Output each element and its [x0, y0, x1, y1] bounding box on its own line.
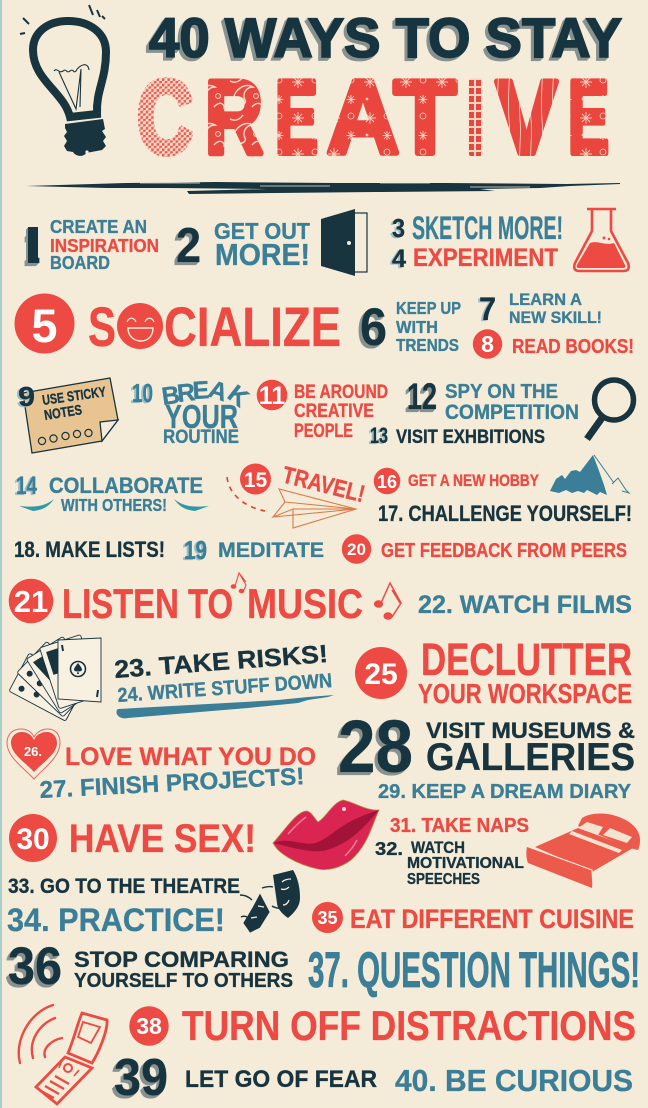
16 get a new hobby: GET A NEW HOBBY	[408, 471, 540, 490]
icon: lips	[273, 800, 379, 870]
38 turn off distractions: 38	[136, 1013, 162, 1039]
12 spy on the competition	[407, 376, 579, 424]
icon: smiley	[117, 303, 163, 349]
8 read books	[473, 329, 634, 359]
27 finish projects: 27. FINISH PROJECTS!	[39, 763, 305, 804]
25 declutter your workspace	[355, 634, 632, 709]
heading: creative: R	[205, 60, 263, 176]
2 get out more	[176, 218, 310, 273]
6 keep up with trends: TRENDS	[396, 335, 459, 355]
6 keep up with trends: 6	[360, 298, 387, 357]
7 learn a new skill	[479, 290, 602, 327]
icon: mountains	[548, 455, 629, 495]
25 declutter your workspace: 25	[364, 658, 398, 691]
10 break your routine: BREAK	[160, 375, 254, 413]
10 break your routine: YOUR	[165, 398, 238, 435]
21 listen to music: MUSIC	[247, 580, 363, 627]
2 get out more: 2	[176, 219, 201, 273]
10 break your routine	[132, 375, 254, 448]
icon: flip phone	[19, 1005, 107, 1104]
33 go to the theatre: 33. GO TO THE THEATRE	[8, 875, 240, 898]
36 stop comparing: 36	[8, 937, 62, 996]
11 be around creative people: 11	[259, 382, 285, 410]
16 get a new hobby	[374, 468, 540, 494]
23 take risks: 23. TAKE RISKS!	[113, 640, 329, 684]
28 visit museums and galleries	[338, 705, 635, 788]
14 collaborate with others: WITH OTHERS!	[61, 495, 167, 515]
13 visit exhibitions: VISIT EXHBITIONS	[396, 427, 545, 448]
title: 40 WAYS TO STAY	[149, 6, 622, 69]
10 break your routine: ROUTINE	[163, 427, 239, 448]
icon: light bulb	[20, 5, 106, 156]
32 watch motivational speeches: WATCH	[411, 838, 465, 857]
5 socialize: 5	[31, 299, 58, 352]
heading: creative: I	[466, 60, 485, 176]
1 create an inspiration board: INSPIRATION	[50, 236, 159, 256]
18 make lists: 18. MAKE LISTS!	[14, 537, 165, 562]
12 spy on the competition: SPY ON THE	[445, 381, 558, 403]
7 learn a new skill: 7	[479, 291, 496, 327]
heading: creative: C	[137, 60, 193, 176]
11 be around creative people: PEOPLE	[294, 421, 353, 442]
28 visit museums and galleries: 28	[338, 705, 413, 788]
15 travel	[227, 462, 368, 528]
39 let go of fear	[114, 1049, 377, 1107]
9 sticky note: NOTES	[43, 401, 83, 423]
6 keep up with trends: WITH	[396, 317, 438, 337]
9 sticky note: 9	[18, 381, 35, 412]
1 create an inspiration board: CREATE AN	[50, 217, 147, 237]
12 spy on the competition: COMPETITION	[445, 401, 579, 424]
1 create an inspiration board: 1	[26, 220, 40, 274]
3 sketch more: 3	[392, 213, 405, 243]
14 collaborate with others	[16, 472, 209, 515]
26 heart: 26.	[24, 744, 42, 759]
heading: creative: E	[568, 60, 609, 176]
30 have sex: HAVE SEX!	[69, 817, 256, 861]
26 love what you do: LOVE WHAT YOU DO	[65, 743, 316, 771]
32 watch motivational speeches: 32.	[375, 839, 403, 859]
10 break your routine: 10	[132, 378, 153, 408]
4 experiment: 4	[392, 245, 406, 273]
32 watch motivational speeches: SPEECHES	[407, 871, 480, 888]
32 watch motivational speeches: MOTIVATIONAL	[407, 855, 524, 872]
heading: creative: A	[327, 60, 399, 176]
15 travel: TRAVEL!	[280, 462, 368, 508]
26 heart	[7, 729, 60, 779]
brush stroke	[116, 695, 334, 718]
21 listen to music: 21	[14, 584, 48, 619]
13 visit exhibitions: 13	[370, 423, 388, 448]
7 learn a new skill: NEW SKILL!	[509, 308, 602, 327]
icon: large note	[374, 583, 401, 620]
16 get a new hobby: 16	[377, 472, 397, 492]
icon: playing cards	[9, 635, 101, 721]
8 read books: 8	[481, 331, 494, 357]
35 eat different cuisine: 35	[317, 908, 338, 928]
34 practice: 34. PRACTICE!	[7, 902, 225, 938]
icon: theatre masks	[240, 870, 300, 933]
1 create an inspiration board: BOARD	[50, 253, 110, 273]
19 meditate: MEDITATE	[218, 539, 324, 562]
24 write stuff down: 24. WRITE STUFF DOWN	[117, 670, 333, 707]
30 have sex: 30	[16, 823, 50, 856]
icon: door	[321, 209, 367, 276]
28 visit museums and galleries: GALLERIES	[426, 736, 635, 779]
icon: small note	[231, 573, 246, 593]
19 meditate	[184, 535, 324, 565]
heading: creative: E	[275, 60, 318, 176]
12 spy on the competition: 12	[407, 376, 437, 417]
39 let go of fear: LET GO OF FEAR	[185, 1066, 377, 1093]
30 have sex	[9, 814, 256, 862]
2 get out more: GET OUT	[214, 218, 310, 244]
36 stop comparing: STOP COMPARING	[74, 947, 289, 972]
3 sketch more	[392, 210, 563, 246]
6 keep up with trends: KEEP UP	[396, 298, 461, 318]
39 let go of fear: 39	[114, 1049, 168, 1107]
40 be curious: 40. BE CURIOUS	[395, 1063, 633, 1098]
15 travel: 15	[244, 469, 267, 492]
5 socialize: S	[88, 295, 116, 358]
5 socialize	[14, 294, 341, 358]
5 socialize: O	[117, 295, 163, 358]
31 take naps: 31. TAKE NAPS	[390, 815, 529, 837]
32 watch motivational speeches	[375, 838, 524, 888]
22 watch films: 22. WATCH FILMS	[418, 591, 632, 619]
21 listen to music: LISTEN TO	[62, 580, 233, 627]
heading: creative: T	[394, 60, 456, 176]
icon: paper plane	[273, 489, 356, 528]
icon: bed	[526, 814, 640, 888]
6 keep up with trends	[360, 298, 461, 357]
9 sticky note: USE STICKY	[41, 383, 107, 408]
7 learn a new skill: LEARN A	[509, 290, 582, 309]
1 create an inspiration board	[26, 217, 159, 274]
28 visit museums and galleries: VISIT MUSEUMS &	[426, 718, 635, 743]
19 meditate: 19	[184, 535, 207, 565]
11 be around creative people: CREATIVE	[294, 401, 374, 422]
14 collaborate with others: 14	[16, 472, 37, 500]
36 stop comparing	[8, 937, 293, 996]
20 get feedback from peers	[342, 534, 627, 564]
36 stop comparing: YOURSELF TO OTHERS	[74, 970, 293, 992]
21 listen to music	[9, 579, 363, 627]
29 keep a dream diary: 29. KEEP A DREAM DIARY	[378, 781, 632, 803]
brush divider	[26, 182, 620, 194]
11 be around creative people: BE AROUND	[294, 382, 388, 403]
20 get feedback from peers: 20	[347, 540, 366, 559]
heading: creative	[137, 60, 609, 176]
icon: flask	[574, 209, 629, 271]
2 get out more: MORE!	[215, 237, 310, 272]
heading: creative: V	[496, 60, 557, 176]
4 experiment: EXPERIMENT	[413, 244, 558, 272]
5 socialize: CIALIZE	[164, 295, 341, 358]
9 sticky note	[18, 378, 118, 453]
13 visit exhibitions	[370, 423, 545, 448]
icon: magnifying glass	[587, 380, 634, 439]
14 collaborate with others: COLLABORATE	[49, 473, 203, 498]
11 be around creative people	[257, 380, 388, 442]
